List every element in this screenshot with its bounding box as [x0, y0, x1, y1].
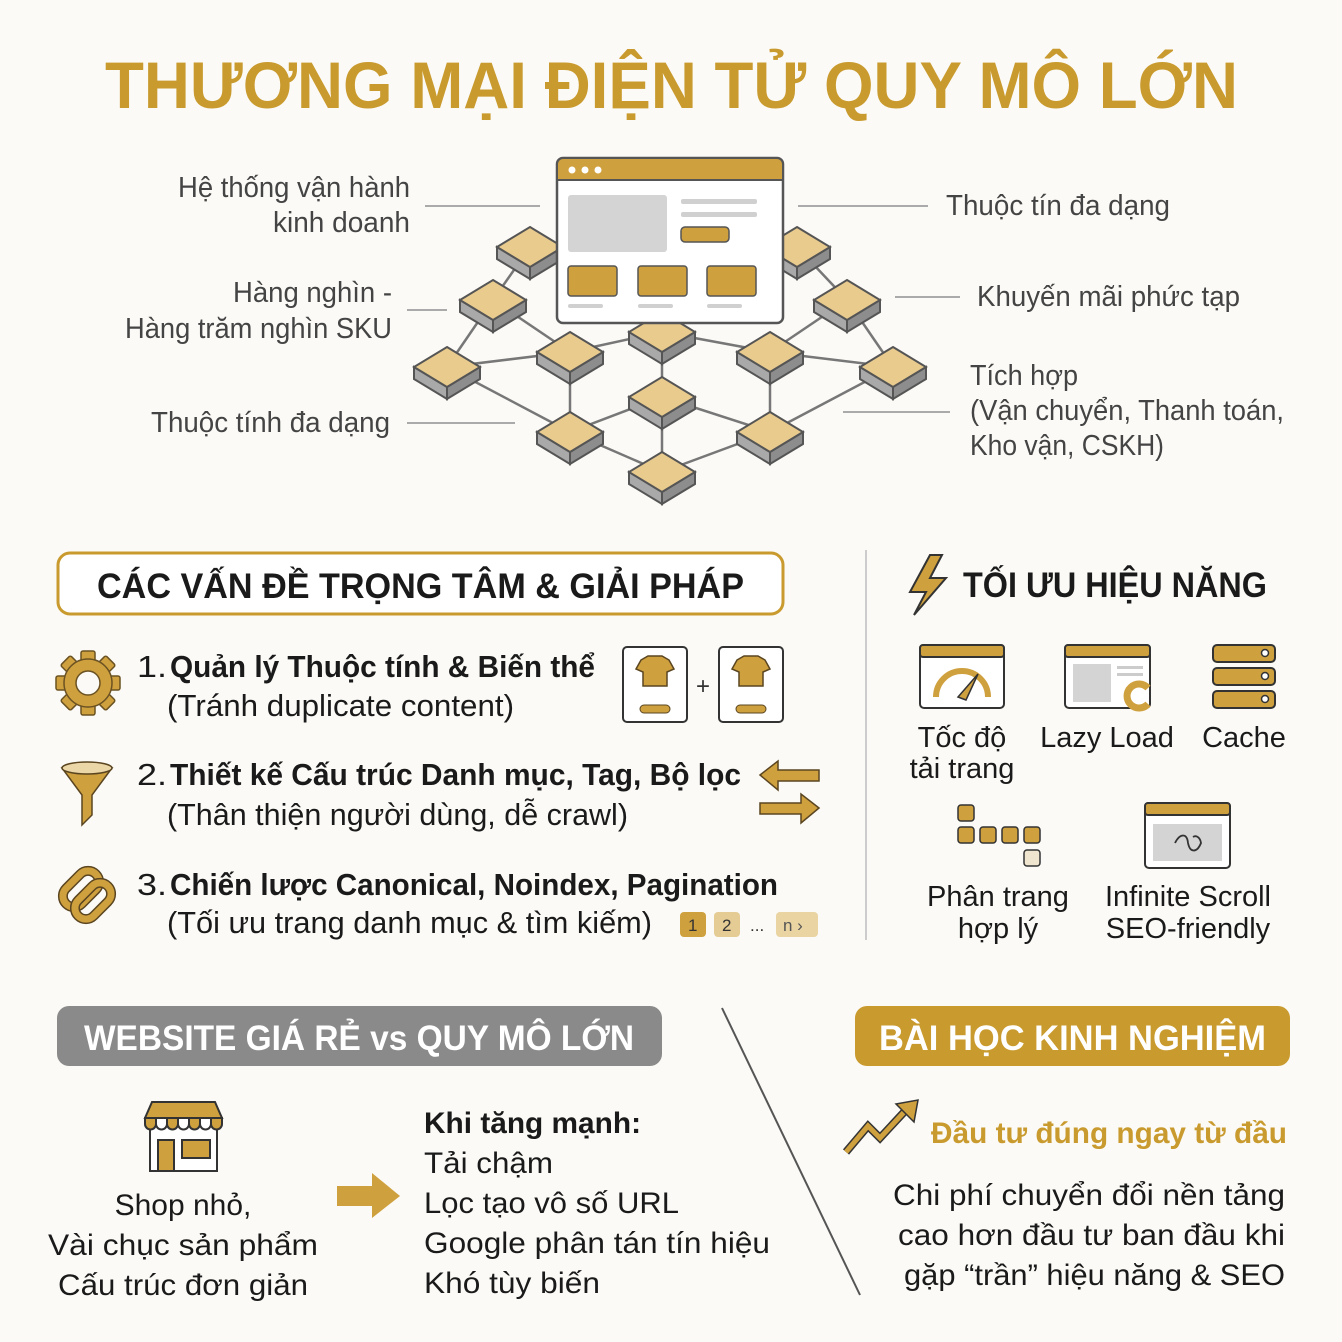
labels left: Hệ thống vận hành [178, 172, 410, 204]
icon: arrows [760, 761, 819, 823]
growth problems [424, 1107, 770, 1300]
labels right: Tích hợp [970, 360, 1078, 392]
browser window [557, 158, 783, 323]
icon: funnel [62, 762, 112, 825]
lesson: cao hơn đầu tư ban đầu khi [898, 1219, 1285, 1252]
icon: gear [56, 651, 120, 715]
icon: trend arrow [846, 1100, 918, 1152]
labels left: Hàng trăm nghìn SKU [125, 313, 392, 345]
small shop: Cấu trúc đơn giản [58, 1269, 308, 1302]
labels right [946, 190, 1284, 462]
icon: pagination [680, 912, 818, 937]
issue 2: Thiết kế Cấu trúc Danh mục, Tag, Bộ lọc [170, 757, 741, 792]
growth problems: Tải chậm [424, 1147, 553, 1180]
perf: pagination: hợp lý [958, 913, 1039, 945]
issue 2 [62, 757, 819, 832]
heading: lessons [855, 1006, 1290, 1066]
issue 1 [56, 647, 783, 723]
perf: cache [1202, 645, 1286, 754]
issue 2: (Thân thiện người dùng, dễ crawl) [167, 797, 628, 832]
arrow [337, 1173, 400, 1218]
growth problems: Khó tùy biến [424, 1267, 600, 1300]
perf: cache: Cache [1202, 722, 1286, 754]
lesson [846, 1100, 1287, 1292]
perf: lazy load [1040, 645, 1174, 754]
heading: key issues: CÁC VẤN ĐỀ TRỌNG TÂM & GIẢI PHÁP [97, 566, 744, 606]
labels left: kinh doanh [273, 207, 410, 239]
icon: shirts: + [696, 673, 710, 700]
small shop: Vài chục sản phẩm [48, 1229, 318, 1262]
heading: performance [910, 555, 1267, 615]
icon: pagination: 2 [722, 916, 731, 935]
perf: pagination: Phân trang [927, 881, 1069, 913]
lesson: Chi phí chuyển đổi nền tảng [893, 1179, 1285, 1212]
labels left: Thuộc tính đa dạng [151, 407, 390, 439]
heading: performance: TỐI ƯU HIỆU NĂNG [963, 565, 1267, 605]
issue 3: (Tối ưu trang danh mục & tìm kiếm) [167, 905, 652, 940]
labels left: Hàng nghìn - [233, 277, 392, 309]
perf: infinite scroll: SEO-friendly [1106, 913, 1271, 945]
perf: pagination [927, 805, 1069, 945]
heading: cheap vs large [57, 1006, 662, 1066]
labels right: (Vận chuyển, Thanh toán, [970, 395, 1284, 427]
small shop [48, 1102, 318, 1302]
labels right: Kho vận, CSKH) [970, 430, 1164, 462]
heading: key issues [58, 553, 783, 614]
icon: pagination: 1 [688, 916, 697, 935]
icon: shirts [623, 647, 783, 722]
perf: speed: tải trang [910, 753, 1014, 785]
issue 1: (Tránh duplicate content) [167, 688, 514, 723]
issue 3: 3. [137, 867, 167, 902]
lesson: Đầu tư đúng ngay từ đầu [931, 1117, 1287, 1150]
perf: infinite scroll: Infinite Scroll [1105, 881, 1271, 913]
heading: lessons: BÀI HỌC KINH NGHIỆM [879, 1018, 1266, 1058]
issue 1: Quản lý Thuộc tính & Biến thể [170, 649, 595, 684]
growth problems: Google phân tán tín hiệu [424, 1227, 770, 1260]
labels right: Thuộc tín đa dạng [946, 190, 1170, 222]
perf: speed [910, 645, 1014, 785]
perf: infinite scroll [1105, 803, 1271, 945]
icon: pagination: n › [783, 916, 803, 935]
network illustration [414, 158, 926, 504]
labels left [125, 172, 410, 439]
icon: pagination: ... [750, 916, 764, 935]
small shop: Shop nhỏ, [115, 1189, 251, 1222]
icon: chain [58, 866, 116, 924]
issue 1: 1. [137, 649, 167, 684]
growth problems: Khi tăng mạnh: [424, 1107, 641, 1140]
title: THƯƠNG MẠI ĐIỆN TỬ QUY MÔ LỚN [105, 48, 1238, 122]
growth problems: Lọc tạo vô số URL [424, 1187, 679, 1220]
perf: lazy load: Lazy Load [1040, 722, 1174, 754]
lesson: gặp “trần” hiệu năng & SEO [904, 1259, 1285, 1292]
icon: shop [145, 1102, 222, 1171]
labels right: Khuyến mãi phức tạp [977, 281, 1240, 313]
issue 3 [58, 866, 818, 940]
heading: cheap vs large: WEBSITE GIÁ RẺ vs QUY MÔ LỚN [84, 1018, 634, 1058]
issue 3: Chiến lược Canonical, Noindex, Pagination [170, 867, 778, 902]
perf: speed: Tốc độ [918, 722, 1006, 754]
issue 2: 2. [137, 757, 167, 792]
